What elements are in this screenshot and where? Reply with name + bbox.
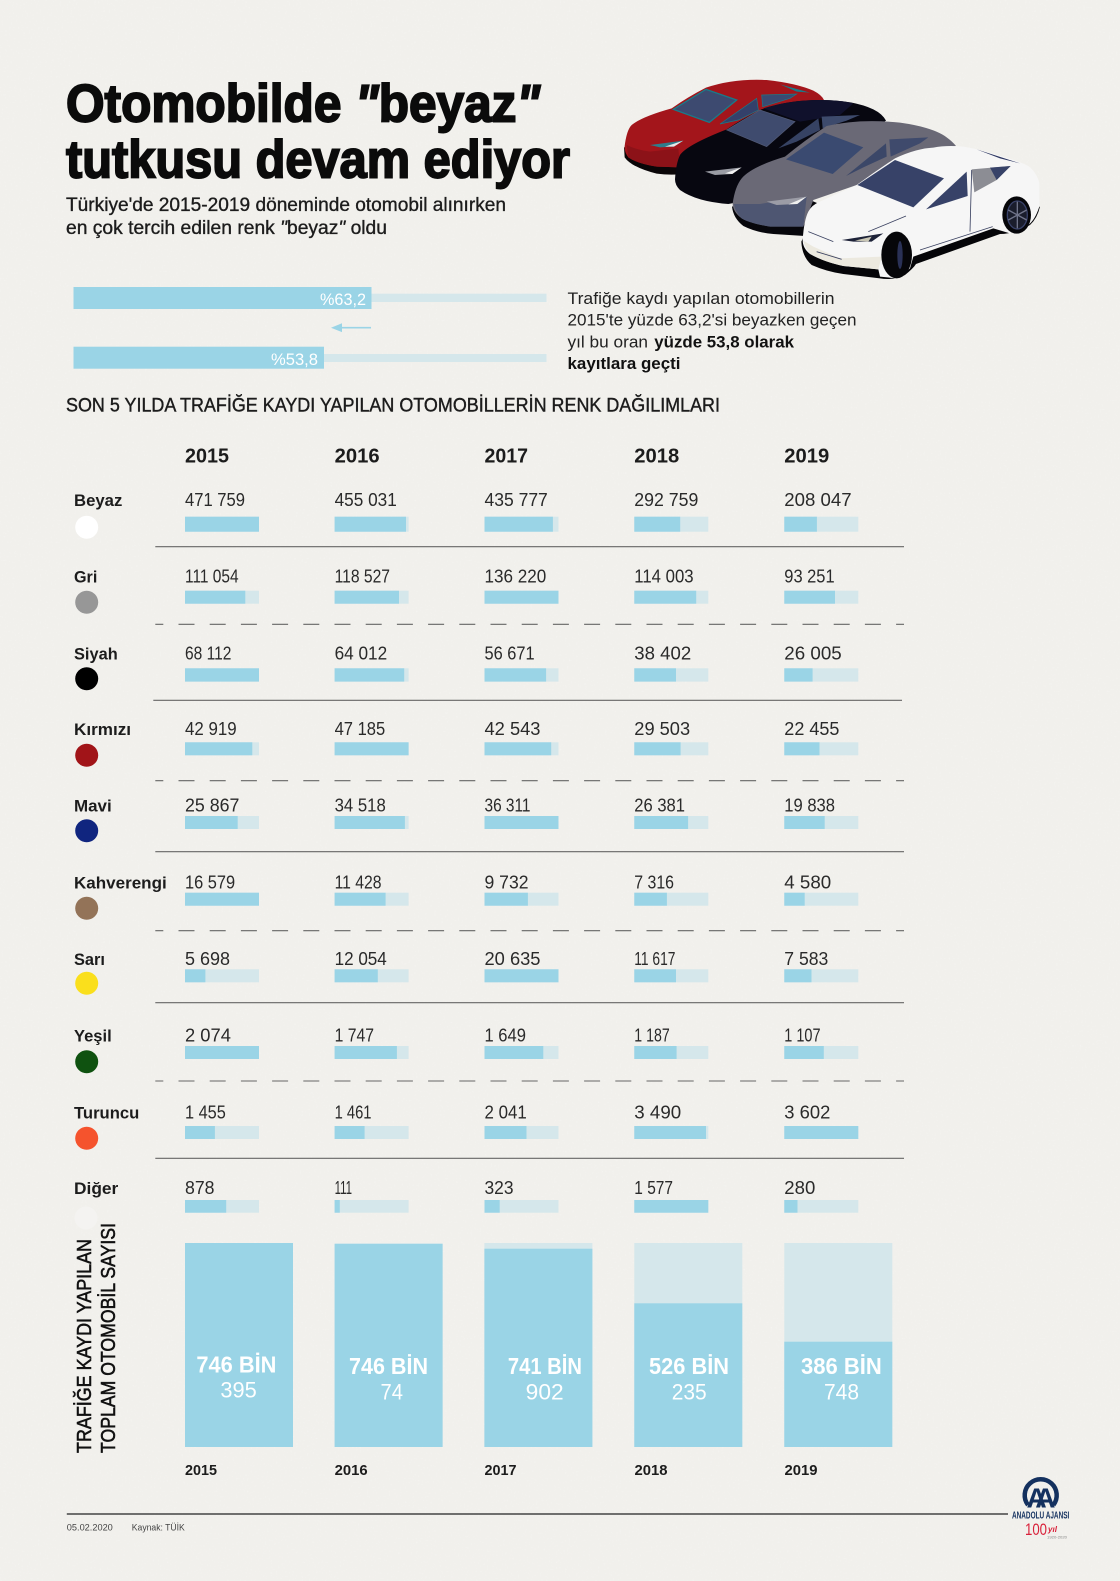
row: Kahverengi: Kahverengi [74, 873, 167, 892]
row: Mavi: 34 518 [335, 796, 386, 816]
row: Gri [74, 567, 858, 614]
row: Mavi [74, 796, 858, 842]
row: Kahverengi: 11 428 [335, 872, 382, 892]
vertical axis label: TRAFİĞE KAYDI YAPILAN [73, 1239, 96, 1453]
footer: date and source: Kaynak: TÜİK [132, 1523, 185, 1533]
row: Siyah: 64 012 [335, 643, 387, 663]
total bar: 2017: 741 BİN [508, 1353, 582, 1379]
title: tutkusu devam ediyor [66, 131, 570, 190]
bar: 2015 share [74, 287, 546, 309]
total bar: 2016: 746 BİN [349, 1353, 428, 1379]
row: Kırmızı [74, 719, 858, 767]
comparison bars [74, 287, 546, 369]
row: Mavi: 26 381 [634, 796, 685, 816]
description text: yüzde 53,8 olarak [654, 332, 795, 351]
footer: date and source [67, 1523, 185, 1533]
car: red [624, 80, 824, 175]
row: Mavi: 25 867 [185, 796, 239, 816]
row: Turuncu: 3 602 [784, 1102, 830, 1122]
row: Diğer: 1 577 [634, 1178, 673, 1198]
row: Beyaz: 435 777 [484, 490, 548, 510]
row: Siyah: 68 112 [185, 643, 231, 663]
row: Siyah [74, 643, 858, 690]
row: Beyaz: 292 759 [634, 490, 698, 510]
row: Kırmızı: 22 455 [784, 719, 839, 739]
total bar: 2019: 748 [824, 1379, 859, 1404]
row: Turuncu: 1 461 [335, 1102, 372, 1122]
row: Sarı: 11 617 [634, 949, 675, 969]
table year headers: 2016 [335, 446, 380, 468]
row: Beyaz: Beyaz [74, 491, 122, 510]
row: Beyaz: 471 759 [185, 490, 245, 510]
title [66, 75, 570, 190]
row: Turuncu: 1 455 [185, 1102, 226, 1122]
car: black [675, 100, 886, 204]
row: Beyaz: 455 031 [335, 490, 397, 510]
table year headers: 2017 [484, 446, 528, 468]
row: Yeşil: 1 747 [335, 1026, 374, 1046]
row: Kırmızı: 42 919 [185, 719, 237, 739]
total bar: 2015: 2015 [185, 1462, 217, 1479]
logo: Anadolu Ajansi: yıl [1047, 1525, 1058, 1534]
row: Yeşil [74, 1026, 858, 1073]
row: Sarı: Sarı [74, 950, 105, 969]
logo: Anadolu Ajansi: ANADOLU AJANSI [1012, 1509, 1069, 1521]
vertical axis label [73, 1223, 120, 1453]
row: Mavi: 36 311 [484, 796, 530, 816]
row: Mavi: 19 838 [784, 796, 835, 816]
row: Diğer: 111 [335, 1178, 352, 1198]
row: Siyah: 56 671 [484, 643, 535, 663]
arrow: decrease [331, 323, 371, 332]
bar: 2015 share: %63,2 [320, 290, 366, 309]
row: Siyah: 26 005 [784, 643, 842, 663]
illustration: four cars [624, 80, 1040, 279]
row: Gri: 114 003 [634, 567, 694, 587]
row: Beyaz: 208 047 [784, 490, 852, 510]
description text: 2015'te yüzde 63,2'si beyazken geçen [568, 310, 856, 329]
total bar: 2018: 526 BİN [649, 1353, 729, 1379]
row: Sarı: 20 635 [484, 949, 540, 969]
row: Kahverengi [74, 872, 858, 920]
logo: Anadolu Ajansi: 100 [1025, 1520, 1047, 1539]
row: Gri: 118 527 [335, 567, 390, 587]
subtitle: en çok tercih edilen renk "beyaz" oldu [66, 218, 387, 239]
row: Diğer: 323 [484, 1178, 514, 1198]
row: Kırmızı: Kırmızı [74, 720, 131, 739]
row: Turuncu: 3 490 [634, 1102, 681, 1122]
row: Diğer: 280 [784, 1178, 815, 1198]
row: Siyah: 38 402 [634, 643, 691, 663]
description text: yıl bu oran [568, 332, 648, 351]
total bar: 2019 [784, 1243, 892, 1479]
total bar: 2017: 2017 [484, 1462, 516, 1479]
logo: Anadolu Ajansi: 1920-2020 [1047, 1534, 1068, 1540]
row: Sarı: 7 583 [784, 949, 828, 969]
title: Otomobilde "beyaz" [66, 75, 541, 134]
description text: kayıtlara geçti [568, 354, 680, 373]
car: white [801, 146, 1040, 279]
row: Diğer: Diğer [74, 1179, 119, 1198]
total bar: 2019: 2019 [784, 1462, 818, 1479]
total bar: 2017: 902 [526, 1379, 564, 1404]
subtitle: Türkiye'de 2015-2019 döneminde otomobil alınırken [66, 195, 506, 216]
footer: date and source: 05.02.2020 [67, 1523, 113, 1533]
car: grey [732, 121, 956, 236]
total bar: 2018: 2018 [634, 1462, 668, 1479]
total bar: 2015 [185, 1243, 293, 1479]
total bar: 2019: 386 BİN [801, 1353, 882, 1379]
row: Siyah: Siyah [74, 644, 118, 663]
total bar: 2015: 746 BİN [196, 1352, 276, 1378]
row: Beyaz [74, 490, 858, 539]
total bar: 2016 [335, 1243, 443, 1479]
row: Sarı [74, 949, 858, 995]
row: Yeşil: Yeşil [74, 1027, 112, 1046]
total bar: 2017 [484, 1243, 592, 1479]
row: Sarı: 12 054 [335, 949, 387, 969]
logo: Anadolu Ajansi: AA [1026, 1483, 1056, 1514]
row: Sarı: 5 698 [185, 949, 230, 969]
row: Turuncu: 2 041 [484, 1102, 527, 1122]
row: Turuncu [74, 1102, 858, 1150]
total bar: 2018: 235 [672, 1379, 707, 1404]
row: Diğer [74, 1178, 858, 1230]
row: Kahverengi: 9 732 [484, 872, 528, 892]
table year headers: 2019 [784, 446, 829, 468]
row: Gri: 136 220 [484, 567, 546, 587]
total bar: 2016: 2016 [335, 1462, 368, 1479]
total bar: 2016: 74 [380, 1379, 403, 1404]
table year headers: 2015 [185, 446, 229, 468]
section heading: SON 5 YILDA TRAFİĞE KAYDI YAPILAN OTOMOBİLLERİN RENK DAĞILIMLARI [66, 395, 720, 417]
logo: Anadolu Ajansi [1012, 1479, 1069, 1540]
row: Diğer: 878 [185, 1178, 214, 1198]
bar: 2019 share [74, 347, 546, 369]
row: Yeşil: 1 107 [784, 1026, 820, 1046]
row: Kırmızı: 47 185 [335, 719, 385, 739]
row: Kahverengi: 4 580 [784, 872, 831, 892]
bar: 2019 share: %53,8 [271, 350, 318, 369]
total bar: 2018 [634, 1243, 742, 1479]
table year headers [185, 446, 829, 468]
description text [568, 289, 856, 373]
vertical axis label: TOPLAM OTOMOBİL SAYISI [97, 1223, 120, 1453]
table year headers: 2018 [634, 446, 679, 468]
row: Gri: 111 054 [185, 567, 239, 587]
row: Kahverengi: 16 579 [185, 872, 235, 892]
row: Mavi: Mavi [74, 797, 112, 816]
row: Yeşil: 1 187 [634, 1026, 670, 1046]
total bar chart [185, 1243, 892, 1479]
row: Gri: 93 251 [784, 567, 835, 587]
row: Yeşil: 2 074 [185, 1026, 231, 1046]
total bar: 2015: 395 [220, 1377, 257, 1402]
row: Yeşil: 1 649 [484, 1026, 526, 1046]
row: Kırmızı: 42 543 [484, 719, 540, 739]
row: Turuncu: Turuncu [74, 1103, 139, 1122]
subtitle [66, 195, 506, 239]
row: Kahverengi: 7 316 [634, 872, 674, 892]
row: Kırmızı: 29 503 [634, 719, 690, 739]
row: Gri: Gri [74, 568, 97, 587]
description text: Trafiğe kaydı yapılan otomobillerin [568, 289, 834, 308]
